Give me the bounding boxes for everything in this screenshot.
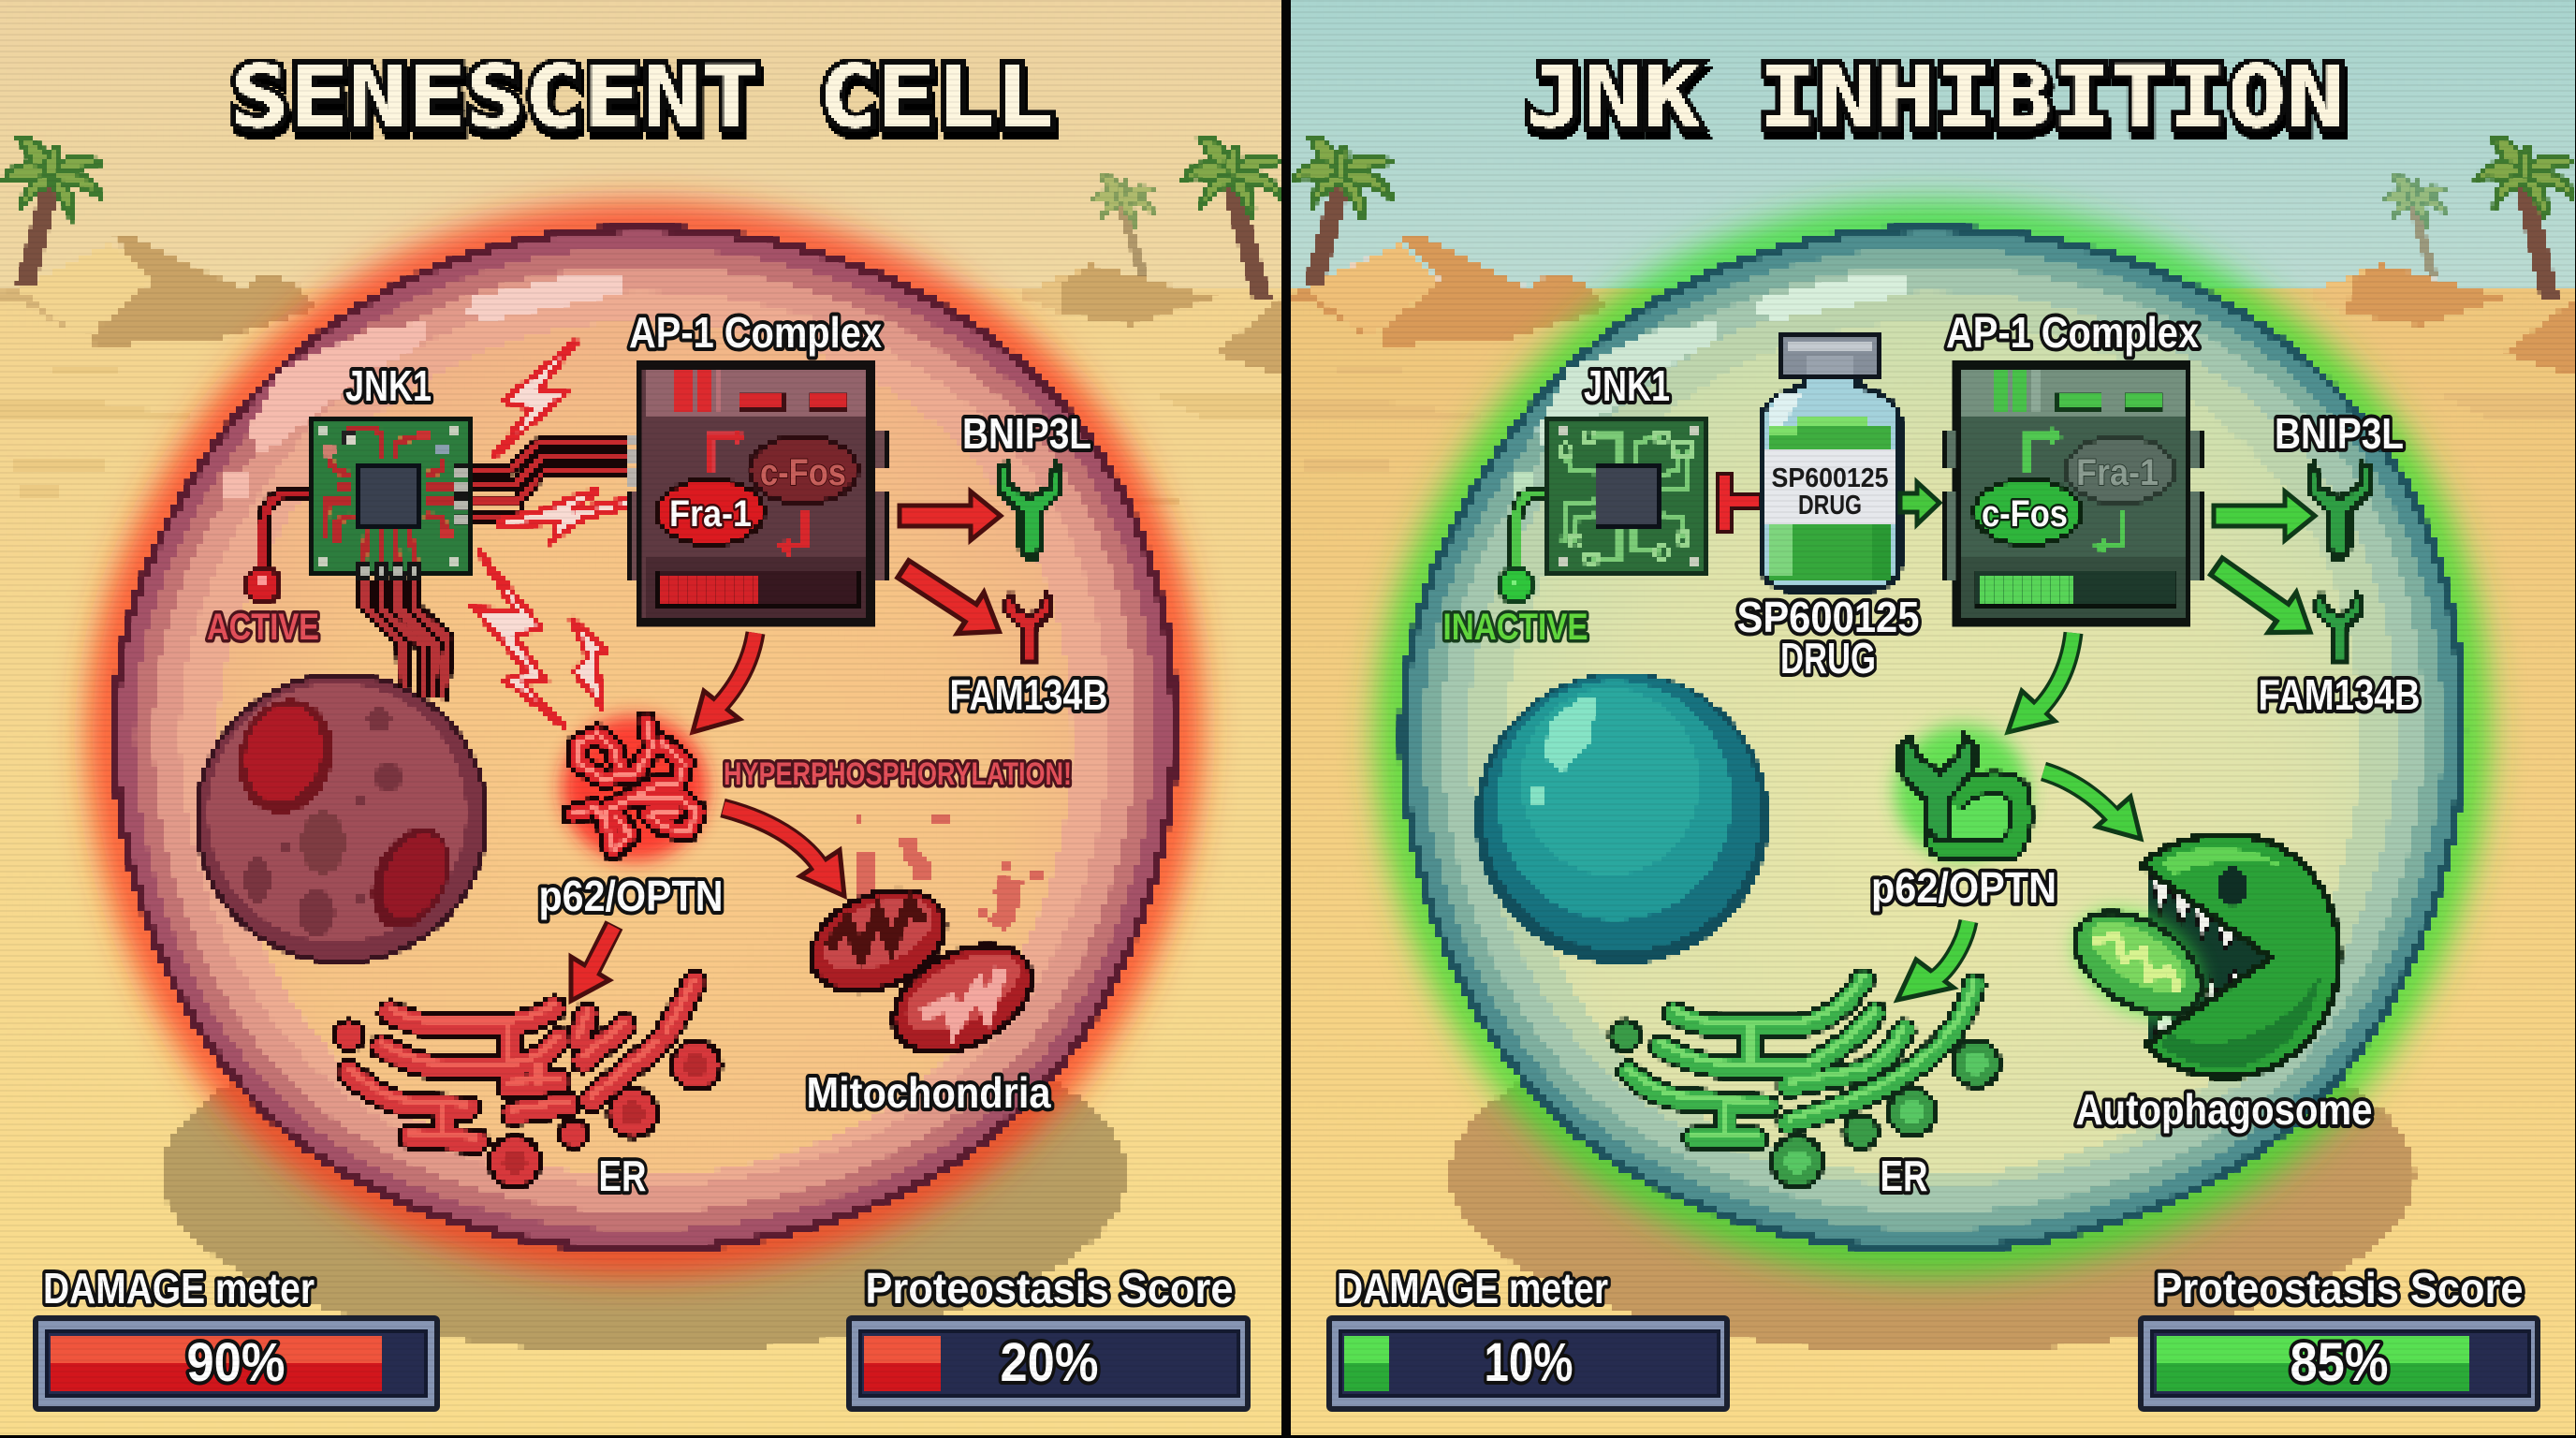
label: p62/OPTN: p62/OPTN [1871,863,2056,912]
arrow: AP-1 to p62 [693,633,755,732]
cell body [1398,225,2466,1254]
label: BNIP3L: BNIP3L [962,409,1091,458]
proteostasis score meter: Proteostasis Score [2155,1264,2524,1313]
status light: inactive [1497,565,1534,605]
arrow: to FAM134B [2203,547,2324,652]
label: JNK1: JNK1 [1584,361,1670,410]
label: AP-1 Complex: AP-1 Complex [629,308,882,357]
nucleus: damaged [195,672,489,964]
lightning bolts [475,340,633,727]
label: c-Fos: c-Fos [760,452,846,493]
cell glow [110,225,1178,1254]
organelle: restored ER [1610,976,1999,1187]
chip: JNK1 active [263,415,639,699]
label: SP600125 drug: SP600125 [1737,593,1919,641]
label: FAM134B: FAM134B [949,670,1108,719]
proteostasis score meter: 85% [2290,1332,2389,1393]
background: desert scene with teal sky [1294,0,2576,1438]
label: vial text: SP600125 [1771,463,1889,493]
label: Mitochondria: Mitochondria [807,1068,1051,1117]
label: Fra-1: Fra-1 [669,493,752,535]
title: JNK INHIBITION [1525,47,2345,147]
arrow: to BNIP3L [2214,492,2315,540]
organelle: fragmented ER [334,979,721,1187]
arrow: to FAM134B [890,549,1013,652]
receptor: BNIP3L [2308,463,2370,557]
panel: senescent cell [0,0,1283,1438]
protein: p62/OPTN engaged [1895,725,2029,859]
label: vial text: DRUG [1798,491,1862,521]
damage meter [33,1264,440,1412]
label: Fra-1: Fra-1 [2076,452,2159,493]
label: ER: ER [599,1152,646,1200]
label: HYPERPHOSPHORYLATION: HYPERPHOSPHORYLATION! [724,756,1072,792]
label: Autophagosome: Autophagosome [2076,1085,2372,1134]
icon: palm tree left [3,138,103,285]
background: desert scene [0,0,1281,1438]
icon: palm tree left [1293,137,1393,285]
damage meter: DAMAGE meter [1337,1264,1608,1313]
title: SENESCENT CELL [230,47,1054,147]
vial: SP600125 drug [1761,335,1900,590]
inhibition bar [1718,474,1761,532]
proteostasis score meter [2138,1264,2540,1412]
label: INACTIVE: INACTIVE [1443,607,1588,648]
label: SP600125 drug [1737,593,1919,682]
receptor: FAM134B [2317,594,2362,660]
label: BNIP3L: BNIP3L [2275,409,2404,458]
damage meter: 90% [187,1332,285,1393]
organelle: damaged mitochondria [792,814,1053,1078]
arrow: p62 to ER [1897,921,1969,1000]
icon: palm tree right [2476,137,2576,298]
proteostasis score meter [846,1264,1251,1412]
damage meter: 10% [1485,1332,1573,1393]
arrow: to BNIP3L [900,492,1001,540]
icon: distant palm tree [1090,174,1155,275]
divider [1281,0,1294,1438]
damage meter: DAMAGE meter [43,1264,315,1313]
machine: AP-1 complex [1945,365,2203,622]
label: c-Fos: c-Fos [1982,493,2068,535]
cell body [110,225,1178,1254]
label: SP600125 drug: DRUG [1780,634,1876,682]
label: AP-1 Complex: AP-1 Complex [1946,308,2199,357]
protein: p62/OPTN tangled [562,715,708,861]
label: ACTIVE: ACTIVE [207,607,319,648]
chip: JNK1 inactive [1515,415,1710,578]
receptor: FAM134B [1006,594,1051,660]
label: ER: ER [1880,1152,1928,1200]
arrow: drug to AP-1 [1900,482,1939,524]
status light: active [243,565,283,605]
organelle: autophagosome eating mitochondrion [2055,835,2339,1077]
receptor: BNIP3L [1000,463,1061,557]
icon: distant palm tree [2381,174,2447,275]
damage meter [1326,1264,1730,1412]
arrow: p62 to ER [571,925,614,1001]
label: FAM134B: FAM134B [2258,670,2421,719]
arrow: p62 to autophagosome [2043,771,2141,839]
nucleus: healthy [1475,672,1769,964]
arrow: p62 to mitochondria [723,808,844,896]
proteostasis score meter: 20% [1000,1332,1099,1393]
label: p62/OPTN: p62/OPTN [539,872,723,920]
label: vial text [1771,463,1889,521]
arrow: AP-1 to p62 [2008,633,2073,732]
panel: JNK inhibition [1293,0,2576,1438]
label: JNK1: JNK1 [345,361,432,410]
icon: palm tree right [1183,137,1283,298]
cell glow [1398,225,2466,1254]
proteostasis score meter: Proteostasis Score [865,1264,1234,1313]
machine: AP-1 complex [628,365,886,622]
